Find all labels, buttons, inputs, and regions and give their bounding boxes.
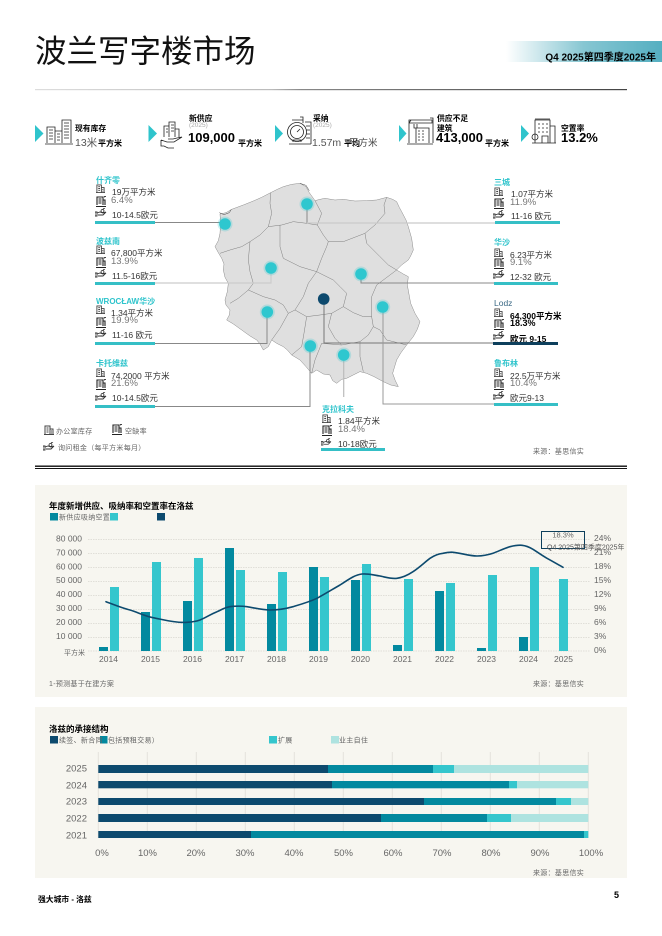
city: Warsaw: 华沙 bbox=[494, 237, 510, 247]
left axis: 30 000 bbox=[56, 603, 82, 613]
percent axis bbox=[95, 848, 604, 859]
right axis bbox=[594, 533, 611, 655]
city: Katowice: 74,2000 平方米 bbox=[111, 371, 170, 381]
city: Tricity: 三城 bbox=[494, 177, 510, 187]
city: Lublin bbox=[493, 358, 561, 406]
city: Wroclaw: 1.34平方米 bbox=[111, 308, 154, 318]
right axis: 3% bbox=[594, 631, 607, 641]
year labels bbox=[66, 764, 87, 842]
KPI: take-up: 平方米 bbox=[349, 137, 378, 149]
city: Wroclaw bbox=[95, 296, 155, 345]
chart legend: 续签、新合同 bbox=[59, 736, 103, 744]
city: Krakow bbox=[321, 404, 385, 451]
map legend: 空缺率 bbox=[125, 426, 147, 436]
KPI: new supply: 平方米 bbox=[238, 138, 262, 148]
KPI: take-up: 平均 bbox=[344, 138, 360, 148]
chart legend: 新供应吸纳空置率 bbox=[59, 512, 117, 522]
KPI: under construction: 供应不足 bbox=[437, 113, 468, 123]
city markers bbox=[218, 196, 390, 362]
stacked row 2023 bbox=[98, 798, 588, 805]
x axis: 2024 bbox=[519, 654, 538, 664]
percent axis: 100% bbox=[579, 848, 604, 859]
KPI: take-up: 1.57m bbox=[312, 137, 341, 149]
percent axis: 10% bbox=[138, 848, 158, 859]
left axis: 50 000 bbox=[56, 575, 82, 585]
city: Warsaw: 12-32 欧元 bbox=[510, 272, 552, 282]
map legend: 办公室库存 bbox=[56, 426, 92, 436]
city: Tricity: 11-16 欧元 bbox=[511, 211, 552, 221]
connector lines bbox=[155, 204, 495, 406]
stacked row 2024 bbox=[98, 781, 588, 788]
x axis: 2014 bbox=[99, 654, 118, 664]
KPI: under construction: 建筑 bbox=[437, 123, 453, 133]
title: 波兰写字楼市场 bbox=[35, 33, 256, 69]
left axis: 10 000 bbox=[56, 631, 82, 641]
city: Lublin: 鲁布林 bbox=[494, 358, 518, 368]
city: Lublin: 10.4% bbox=[510, 378, 537, 389]
x axis: 2022 bbox=[435, 654, 454, 664]
percent axis: 30% bbox=[235, 848, 255, 859]
KPI: under construction: 平方米 bbox=[485, 138, 509, 148]
city: Wroclaw: 19.9% bbox=[111, 315, 138, 326]
x axis: 2019 bbox=[309, 654, 328, 664]
percent axis: 20% bbox=[186, 848, 206, 859]
right axis: 15% bbox=[594, 575, 611, 585]
map legend bbox=[43, 424, 147, 452]
stacked row 2025 bbox=[98, 765, 588, 773]
KPI: existing stock: 平方米 bbox=[98, 138, 122, 148]
city: Warsaw: 6.23平方米 bbox=[510, 250, 553, 260]
KPI: take-up bbox=[275, 113, 378, 149]
left axis: 60 000 bbox=[56, 562, 82, 572]
city: Lodz (highlighted): Lodz bbox=[494, 298, 512, 308]
callout: Q4 vacancy: Q4 2025第四季度2025年 bbox=[547, 542, 624, 552]
city: Poznan: 11.5-16欧元 bbox=[112, 271, 158, 281]
city: Krakow: 1.84平方米 bbox=[338, 416, 381, 426]
city: Wroclaw: WROCŁAW华沙 bbox=[96, 296, 155, 306]
city: Lublin: 欧元9-13 bbox=[510, 393, 544, 403]
KPI: new supply bbox=[148, 113, 262, 148]
city: Tricity: 1.07平方米 bbox=[511, 189, 554, 199]
period band bbox=[506, 41, 662, 64]
city: Katowice: 10-14.5欧元 bbox=[112, 393, 158, 403]
percent axis: 90% bbox=[530, 848, 550, 859]
source: 来源：基思信实 bbox=[533, 868, 584, 877]
vacancy line bbox=[106, 545, 563, 622]
right axis: 6% bbox=[594, 617, 607, 627]
chart legend bbox=[50, 736, 368, 744]
year labels: 2022 bbox=[66, 814, 87, 824]
left axis: 40 000 bbox=[56, 589, 82, 599]
city: Szczecin: 6.4% bbox=[111, 195, 133, 206]
right axis: 0% bbox=[594, 645, 607, 655]
left axis: 20 000 bbox=[56, 617, 82, 627]
x axis: 2016 bbox=[183, 654, 202, 664]
chart heading: 年度新增供应、吸纳率和空置率在洛兹 bbox=[49, 501, 194, 511]
percent axis: 60% bbox=[383, 848, 403, 859]
KPI: existing stock: 13米 bbox=[75, 136, 98, 149]
x axis: 2015 bbox=[141, 654, 160, 664]
bars: new supply bbox=[99, 548, 528, 651]
year labels: 2024 bbox=[66, 780, 87, 792]
percent axis: 40% bbox=[284, 848, 304, 859]
city: Lodz (highlighted): 18.3% bbox=[510, 318, 536, 328]
city: Wroclaw: 11-16 欧元 bbox=[112, 330, 153, 340]
city: Krakow: 10-18欧元 bbox=[338, 439, 377, 449]
year labels: 2021 bbox=[66, 830, 87, 842]
percent axis: 80% bbox=[481, 848, 501, 859]
city: Lodz (highlighted): 欧元 9-15 bbox=[510, 334, 547, 344]
KPI: vacancy rate: 空置率 bbox=[561, 123, 585, 133]
source note: 来源：基思信实 bbox=[533, 446, 584, 456]
map legend: 询问租金（每平方米每月） bbox=[58, 443, 146, 452]
x axis: 2018 bbox=[267, 654, 286, 664]
city: Krakow: 克拉科夫 bbox=[322, 404, 354, 414]
x axis bbox=[99, 654, 573, 664]
footnote: 1-预测基于在建方案 bbox=[49, 679, 114, 688]
city: Poznan bbox=[95, 236, 163, 285]
KPI: existing stock: 现有库存 bbox=[75, 123, 106, 133]
left axis: 70 000 bbox=[56, 548, 82, 558]
chart heading: 洛兹的承接结构 bbox=[49, 724, 109, 734]
KPI: under construction bbox=[399, 113, 509, 148]
city: Poznan: 67,800平方米 bbox=[111, 248, 163, 258]
panel: take-up structure bbox=[35, 707, 627, 878]
bars: take-up bbox=[110, 558, 568, 651]
city: Lodz (highlighted): 64,300平方米 bbox=[510, 311, 562, 321]
map of Poland bbox=[155, 183, 495, 406]
year labels: 2023 bbox=[66, 796, 87, 808]
city: Katowice: 卡托维兹 bbox=[96, 358, 128, 368]
city: Katowice: 21.6% bbox=[111, 378, 138, 389]
chart legend: 业主自住 bbox=[339, 736, 368, 744]
KPI: vacancy rate bbox=[521, 119, 598, 145]
city: Krakow: 18.4% bbox=[338, 424, 365, 435]
right axis: 24% bbox=[594, 533, 611, 543]
chart legend: 包括预租交易） bbox=[108, 736, 159, 744]
KPI row bbox=[35, 113, 598, 149]
city: Poznan: 13.9% bbox=[111, 256, 138, 267]
city: Warsaw bbox=[493, 237, 558, 285]
left axis: 平方米 bbox=[64, 648, 85, 657]
city: Szczecin: 19万平方米 bbox=[112, 187, 156, 197]
KPI: take-up: (2025) bbox=[313, 122, 332, 129]
x axis: 2025 bbox=[554, 654, 573, 664]
chart legend bbox=[50, 512, 165, 522]
city: Lodz (highlighted) bbox=[493, 298, 562, 345]
stacked row 2021 bbox=[98, 831, 588, 838]
KPI: take-up: 采纳 bbox=[313, 113, 329, 123]
city: Tricity: 11.9% bbox=[510, 197, 537, 208]
percent axis: 0% bbox=[95, 848, 109, 859]
x axis: 2023 bbox=[477, 654, 496, 664]
left axis bbox=[56, 534, 85, 657]
left axis: 80 000 bbox=[56, 534, 82, 544]
coastline details bbox=[219, 183, 309, 215]
panel: annual supply, take-up, vacancy bbox=[35, 485, 627, 697]
city: Szczecin bbox=[95, 175, 158, 224]
KPI: new supply: 新供应 bbox=[189, 113, 213, 123]
footer: page number: 5 bbox=[614, 890, 619, 900]
city: Szczecin: 什齐零 bbox=[96, 175, 120, 185]
city: Poznan: 波兹南 bbox=[96, 236, 120, 246]
callout: Q4 vacancy bbox=[542, 530, 624, 552]
x axis: 2017 bbox=[225, 654, 244, 664]
period band: Q4 2025第四季度2025年 bbox=[545, 50, 656, 64]
right axis: 12% bbox=[594, 589, 611, 599]
country outline bbox=[215, 183, 420, 387]
city: Warsaw: 9.1% bbox=[510, 257, 532, 268]
KPI: under construction: 413,000 bbox=[436, 130, 483, 145]
right axis: 9% bbox=[594, 603, 607, 613]
x axis: 2021 bbox=[393, 654, 412, 664]
KPI: existing stock bbox=[35, 120, 122, 149]
city: Lublin: 22.5万平方米 bbox=[510, 371, 561, 381]
percent axis: 70% bbox=[432, 848, 452, 859]
footer: section name: 强大城市 - 洛兹 bbox=[38, 894, 92, 904]
KPI: new supply: 109,000 bbox=[188, 130, 235, 145]
source: 来源：基思信实 bbox=[533, 679, 584, 688]
city: Szczecin: 10-14.5欧元 bbox=[112, 210, 158, 220]
percent axis: 50% bbox=[334, 848, 354, 859]
stacked row 2022 bbox=[98, 814, 588, 822]
callout: Q4 vacancy: 18.3% bbox=[552, 530, 574, 540]
year labels: 2025 bbox=[66, 764, 87, 774]
right axis: 18% bbox=[594, 561, 611, 571]
chart legend: 扩展 bbox=[278, 736, 293, 744]
right axis: 21% bbox=[594, 547, 611, 557]
city: Katowice bbox=[95, 358, 170, 408]
city: Tricity bbox=[493, 177, 560, 224]
voivodeship borders bbox=[220, 193, 407, 373]
KPI: new supply: (2025) bbox=[189, 122, 208, 129]
x axis: 2020 bbox=[351, 654, 370, 664]
KPI: vacancy rate: 13.2% bbox=[561, 130, 598, 145]
